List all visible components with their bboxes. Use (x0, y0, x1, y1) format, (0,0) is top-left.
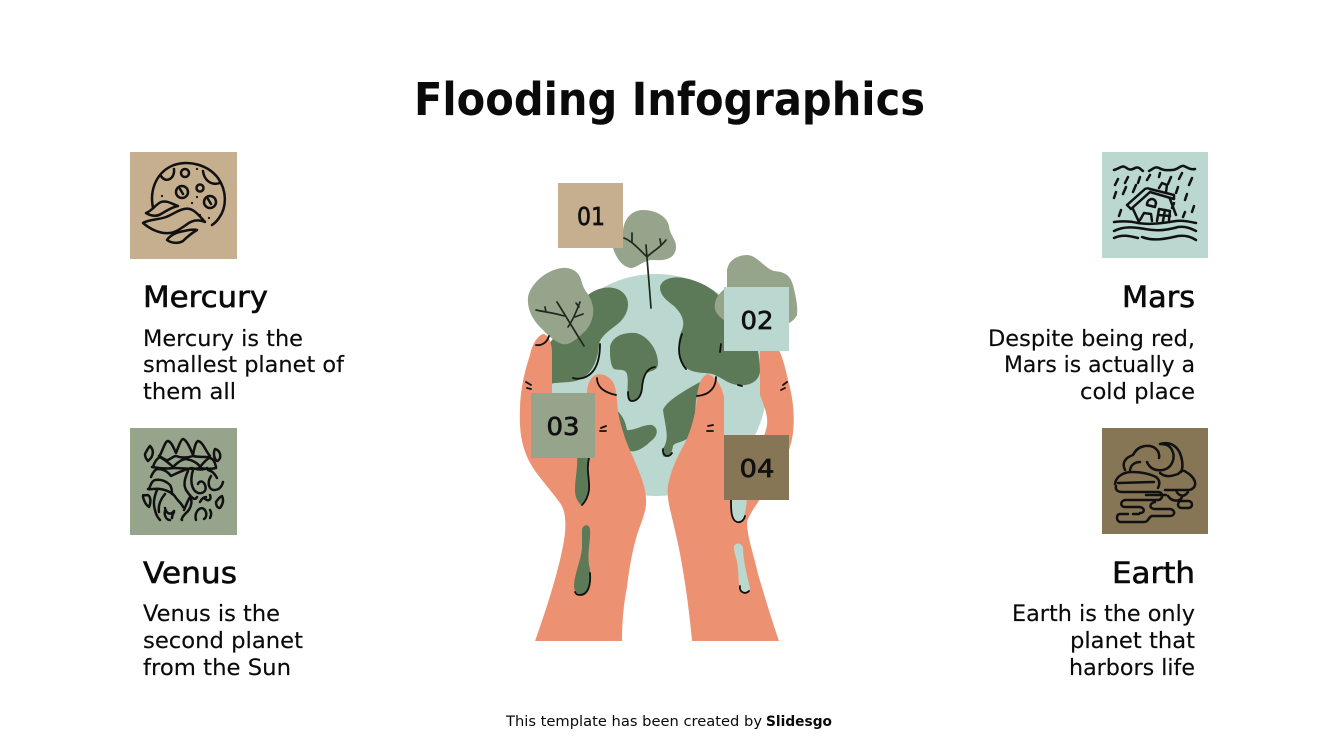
text: Mars description (988, 327, 1195, 405)
heading: Earth: Earth (1112, 556, 1195, 590)
number tag 03 (531, 393, 595, 458)
text: Earth description: harbors life (1069, 656, 1195, 681)
text: Mercury description: them all (143, 380, 236, 405)
text: Mars description: cold place (1080, 380, 1195, 405)
tree: right (715, 255, 797, 327)
text: Venus description (143, 602, 303, 681)
footer credit: This template has been created by (505, 714, 762, 730)
text: Mercury description: smallest planet of (143, 353, 345, 378)
text: Mercury description: Mercury is the (143, 327, 303, 352)
panel: Mercury (130, 152, 345, 405)
number tag 03: 03 (546, 412, 580, 441)
text: Mars description: Despite being red, (988, 327, 1195, 352)
heading: Venus: Venus (143, 556, 237, 590)
text: Earth description: planet that (1070, 629, 1195, 654)
text: Earth description (1012, 602, 1195, 681)
icon: storm cloud and moon over flood (1102, 428, 1208, 534)
text: Mars description: Mars is actually a (1004, 353, 1195, 378)
number tag 01: 01 (577, 202, 605, 231)
number tag 04: 04 (740, 454, 774, 483)
text: Mercury description (143, 327, 345, 405)
globe (545, 274, 767, 496)
text: Venus description: second planet (143, 629, 303, 654)
left hand (520, 334, 646, 641)
number tag 02: 02 (740, 306, 774, 335)
globe land masses (548, 277, 760, 457)
central illustration: hands holding globe (520, 183, 797, 641)
tree trunks and branches (536, 233, 666, 346)
heading: Mercury: Mercury (143, 280, 268, 314)
number tag 04 (724, 435, 789, 500)
text: Venus description: Venus is the (143, 602, 280, 627)
right hand (668, 348, 794, 641)
icon: flooded forest (130, 428, 237, 535)
text: Earth description: Earth is the only (1012, 602, 1195, 627)
number tag 02 (724, 287, 789, 351)
tree: left (528, 268, 593, 344)
icon: flooded house in rain (1102, 152, 1208, 258)
title: Flooding Infographics (414, 73, 925, 126)
tree: top (613, 210, 676, 268)
panel: Earth (1012, 428, 1208, 681)
text: Venus description: from the Sun (143, 656, 291, 681)
panel: Venus (130, 428, 303, 681)
footer credit: Slidesgo (766, 714, 832, 730)
icon: moon over waves (130, 152, 237, 259)
heading: Mars: Mars (1122, 280, 1195, 314)
number tag 01 (558, 183, 623, 248)
panel: Mars (988, 152, 1208, 405)
drips (574, 455, 750, 595)
ink accents (526, 334, 787, 595)
